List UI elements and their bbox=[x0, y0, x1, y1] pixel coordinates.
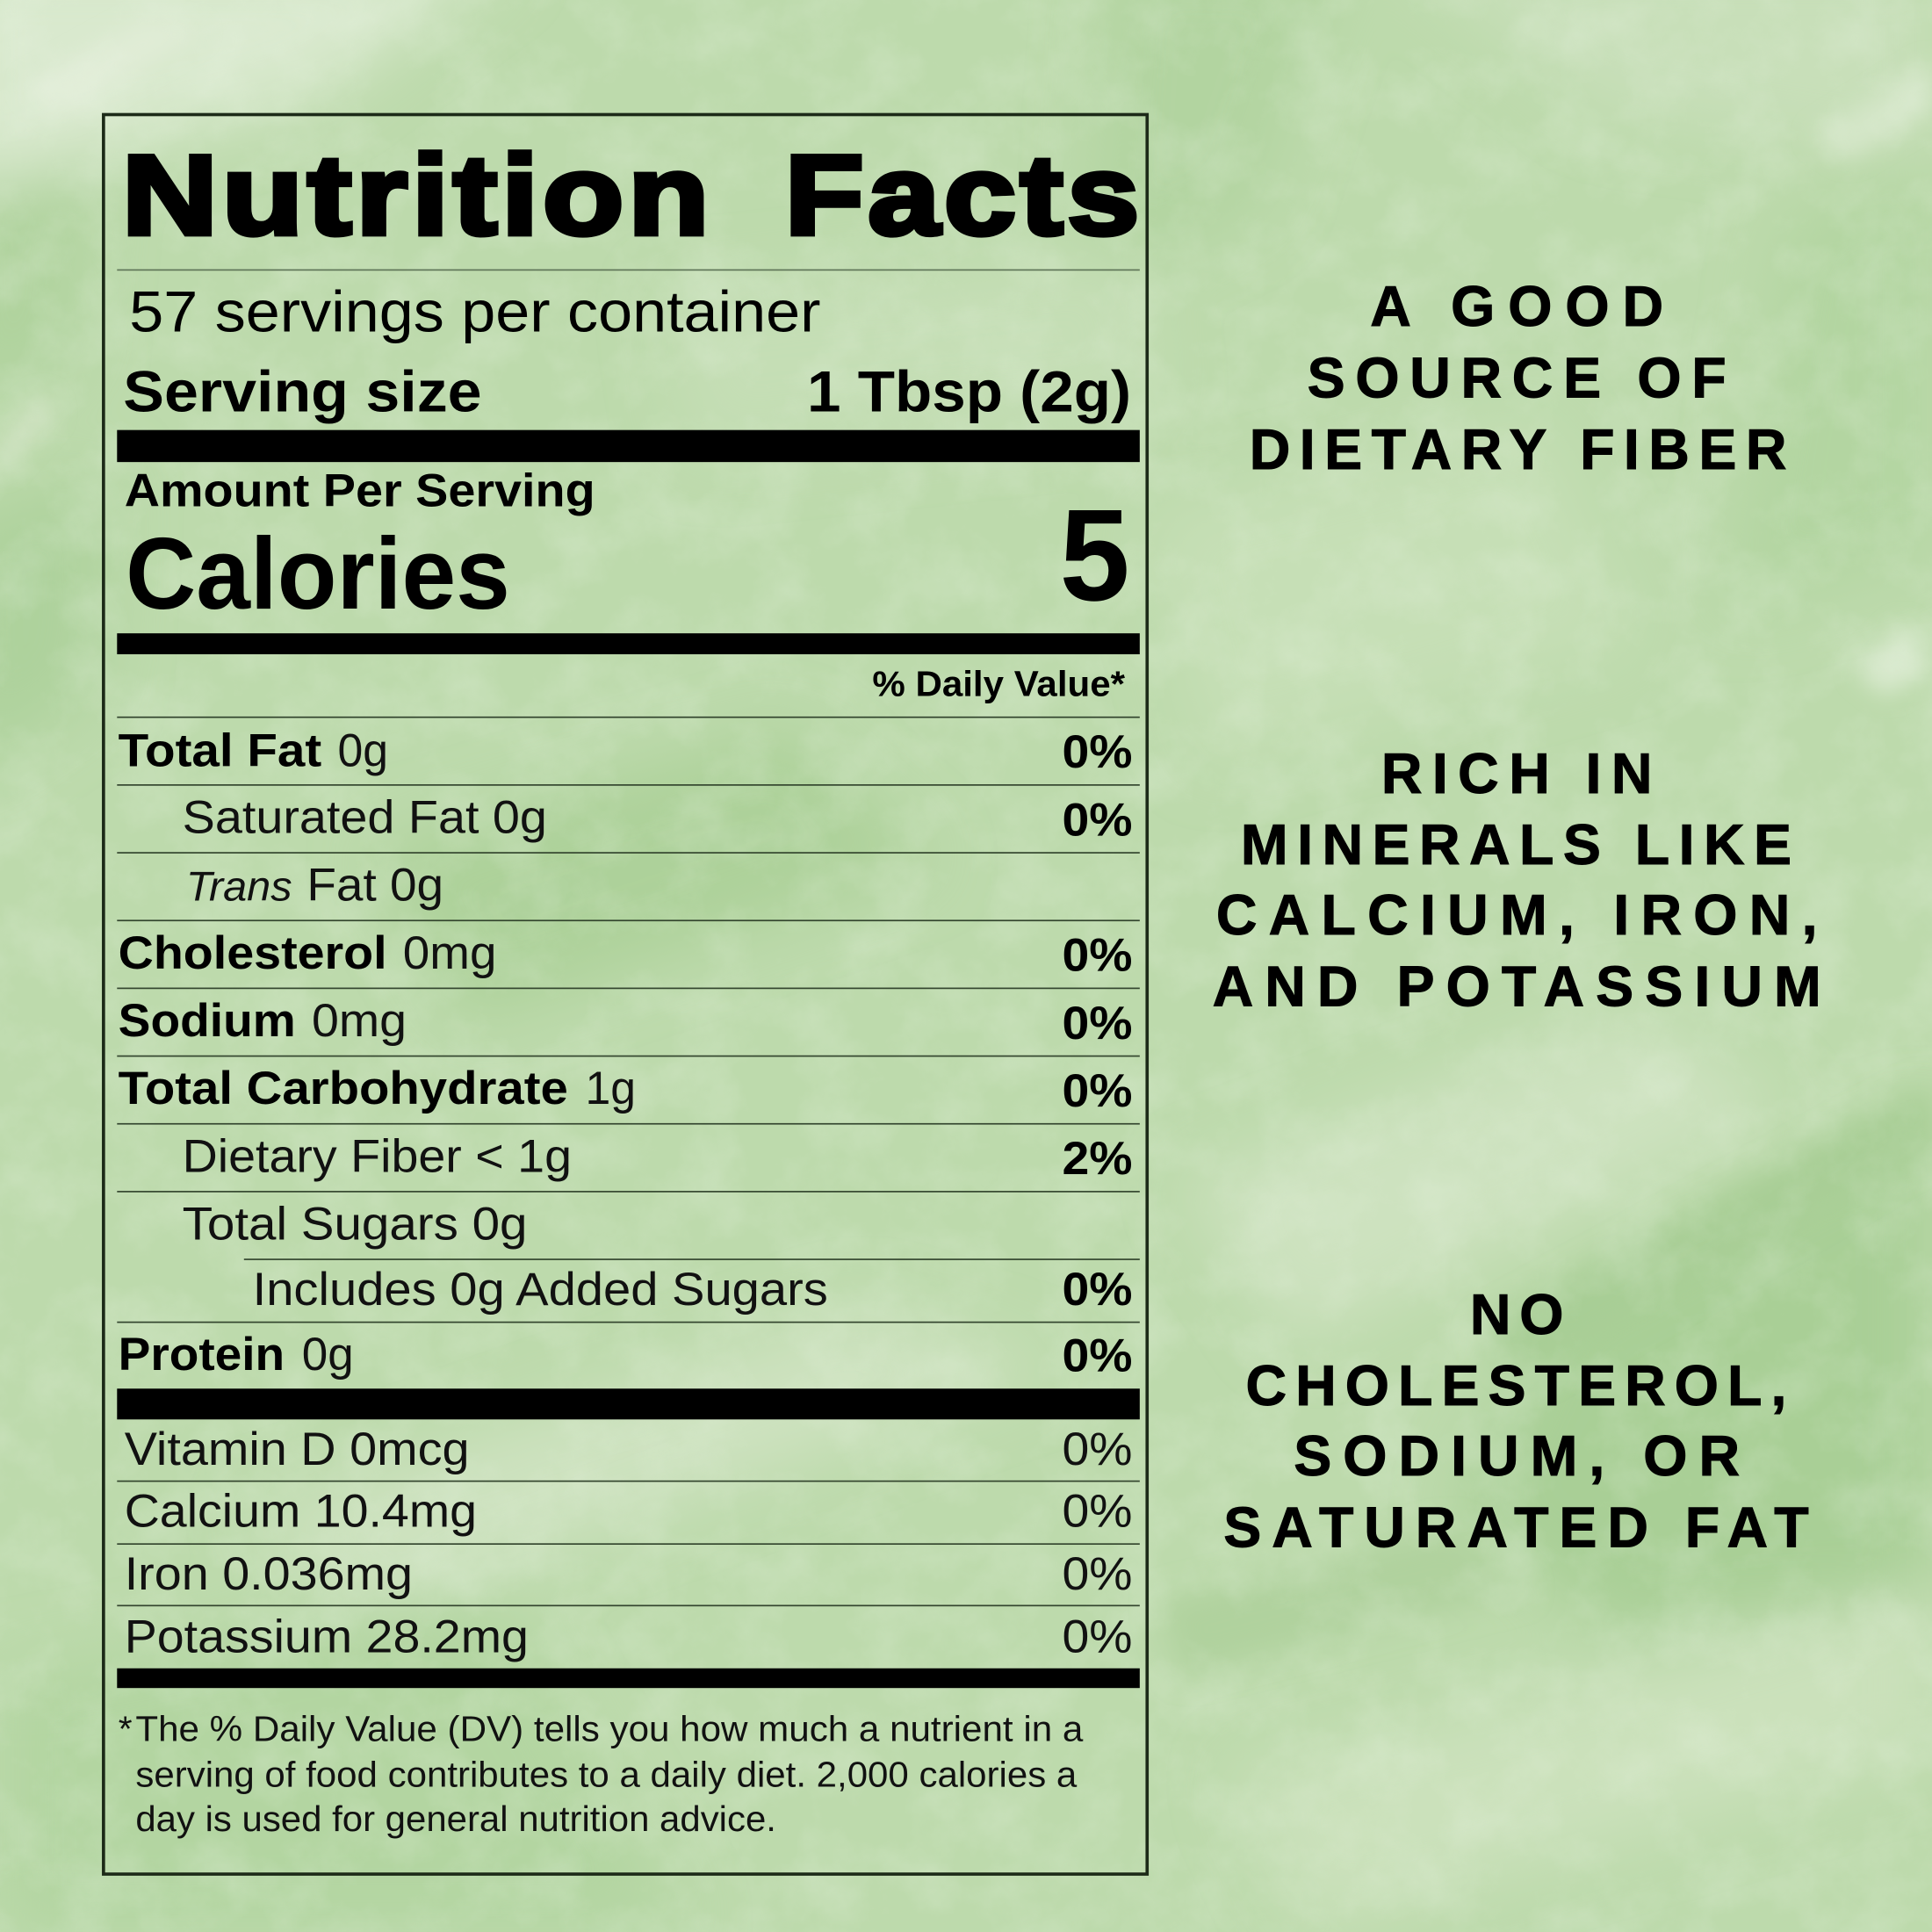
callout: minerals: RICH IN bbox=[1381, 742, 1653, 805]
callout: no cholesterol: NO bbox=[1470, 1283, 1563, 1346]
row: sodium: 0% bbox=[1062, 998, 1132, 1049]
row: protein: 0g bbox=[302, 1329, 354, 1381]
row: vitamin d: Vitamin D 0mcg bbox=[125, 1424, 470, 1475]
row: cholesterol bbox=[119, 927, 1132, 982]
footnote: * bbox=[119, 1709, 133, 1749]
callout: dietary fiber bbox=[1250, 275, 1786, 481]
row: cholesterol: Cholesterol bbox=[119, 927, 387, 979]
row: dietary fiber bbox=[183, 1130, 1132, 1185]
row: total fat bbox=[119, 725, 1132, 778]
row: trans fat: Trans bbox=[186, 864, 292, 911]
callout: dietary fiber: DIETARY FIBER bbox=[1250, 418, 1786, 481]
amount per serving: Amount Per Serving bbox=[125, 465, 595, 517]
row: vitamin d bbox=[125, 1424, 1132, 1475]
row: total fat: 0g bbox=[337, 725, 388, 777]
footnote: serving of food contributes to a daily diet. 2,000 calories a bbox=[135, 1754, 1078, 1794]
row: calcium bbox=[125, 1485, 1132, 1537]
row: total carbohydrate bbox=[119, 1063, 1132, 1117]
callout: minerals: CALCIUM, IRON, bbox=[1216, 883, 1818, 947]
row: total carbohydrate: 0% bbox=[1062, 1065, 1132, 1117]
callout: no cholesterol bbox=[1223, 1283, 1809, 1560]
row: added sugars: Includes 0g Added Sugars bbox=[253, 1264, 828, 1316]
calories row bbox=[126, 481, 1130, 631]
row: added sugars: 0% bbox=[1062, 1264, 1132, 1316]
row: calcium: 0% bbox=[1062, 1485, 1132, 1537]
callout: minerals: MINERALS LIKE bbox=[1241, 813, 1791, 876]
callout: no cholesterol: SATURATED FAT bbox=[1223, 1496, 1809, 1560]
footnote bbox=[119, 1709, 1084, 1839]
row: total sugars: Total Sugars 0g bbox=[183, 1198, 528, 1250]
title: Nutrition bbox=[122, 133, 713, 259]
serving size row bbox=[123, 359, 1131, 424]
callout: dietary fiber: A GOOD bbox=[1370, 275, 1663, 338]
row: potassium: Potassium 28.2mg bbox=[125, 1611, 529, 1663]
panel: nutrition facts label bbox=[104, 114, 1147, 1874]
row: saturated fat: Saturated Fat 0g bbox=[183, 791, 547, 843]
title bbox=[122, 133, 1143, 259]
row: saturated fat: 0% bbox=[1062, 794, 1132, 846]
row: saturated fat bbox=[183, 791, 1132, 846]
row: sodium bbox=[119, 995, 1132, 1049]
row: iron bbox=[125, 1548, 1132, 1600]
row: total carbohydrate: 1g bbox=[585, 1063, 636, 1114]
calories row: Calories bbox=[126, 516, 510, 631]
servings per container: 57 servings per container bbox=[129, 278, 820, 343]
row: iron: 0% bbox=[1062, 1548, 1132, 1600]
row: cholesterol: 0mg bbox=[403, 927, 496, 979]
row: iron: Iron 0.036mg bbox=[125, 1548, 413, 1600]
row: trans fat: Fat 0g bbox=[306, 860, 443, 912]
row: potassium bbox=[125, 1611, 1132, 1663]
serving size row: 1 Tbsp (2g) bbox=[807, 359, 1131, 424]
callout: minerals bbox=[1213, 742, 1821, 1019]
row: total fat: 0% bbox=[1062, 726, 1132, 778]
row: protein bbox=[119, 1329, 1132, 1382]
row: dietary fiber: 2% bbox=[1062, 1133, 1132, 1185]
row: dietary fiber: Dietary Fiber < 1g bbox=[183, 1130, 572, 1182]
calories row: 5 bbox=[1060, 481, 1130, 628]
callout: no cholesterol: SODIUM, OR bbox=[1294, 1424, 1740, 1488]
row: protein: 0% bbox=[1062, 1330, 1132, 1382]
footnote: day is used for general nutrition advice. bbox=[135, 1799, 776, 1839]
footnote: The % Daily Value (DV) tells you how much a nutrient in a bbox=[135, 1709, 1084, 1749]
row: potassium: 0% bbox=[1062, 1611, 1132, 1663]
row: protein: Protein bbox=[119, 1329, 285, 1381]
serving size row: Serving size bbox=[123, 359, 482, 424]
row: calcium: Calcium 10.4mg bbox=[125, 1485, 477, 1537]
row: cholesterol: 0% bbox=[1062, 930, 1132, 982]
row: added sugars bbox=[253, 1264, 1132, 1316]
row: vitamin d: 0% bbox=[1062, 1424, 1132, 1475]
callout: minerals: AND POTASSIUM bbox=[1213, 955, 1821, 1019]
row: sodium: 0mg bbox=[312, 995, 407, 1047]
callout: dietary fiber: SOURCE OF bbox=[1308, 346, 1727, 409]
row: total fat: Total Fat bbox=[119, 725, 321, 777]
title: Facts bbox=[785, 133, 1143, 259]
row: trans fat bbox=[186, 860, 443, 912]
daily value heading: % Daily Value* bbox=[872, 664, 1125, 704]
row: sodium: Sodium bbox=[119, 995, 296, 1047]
callout: no cholesterol: CHOLESTEROL, bbox=[1245, 1354, 1786, 1417]
row: total carbohydrate: Total Carbohydrate bbox=[119, 1063, 568, 1114]
